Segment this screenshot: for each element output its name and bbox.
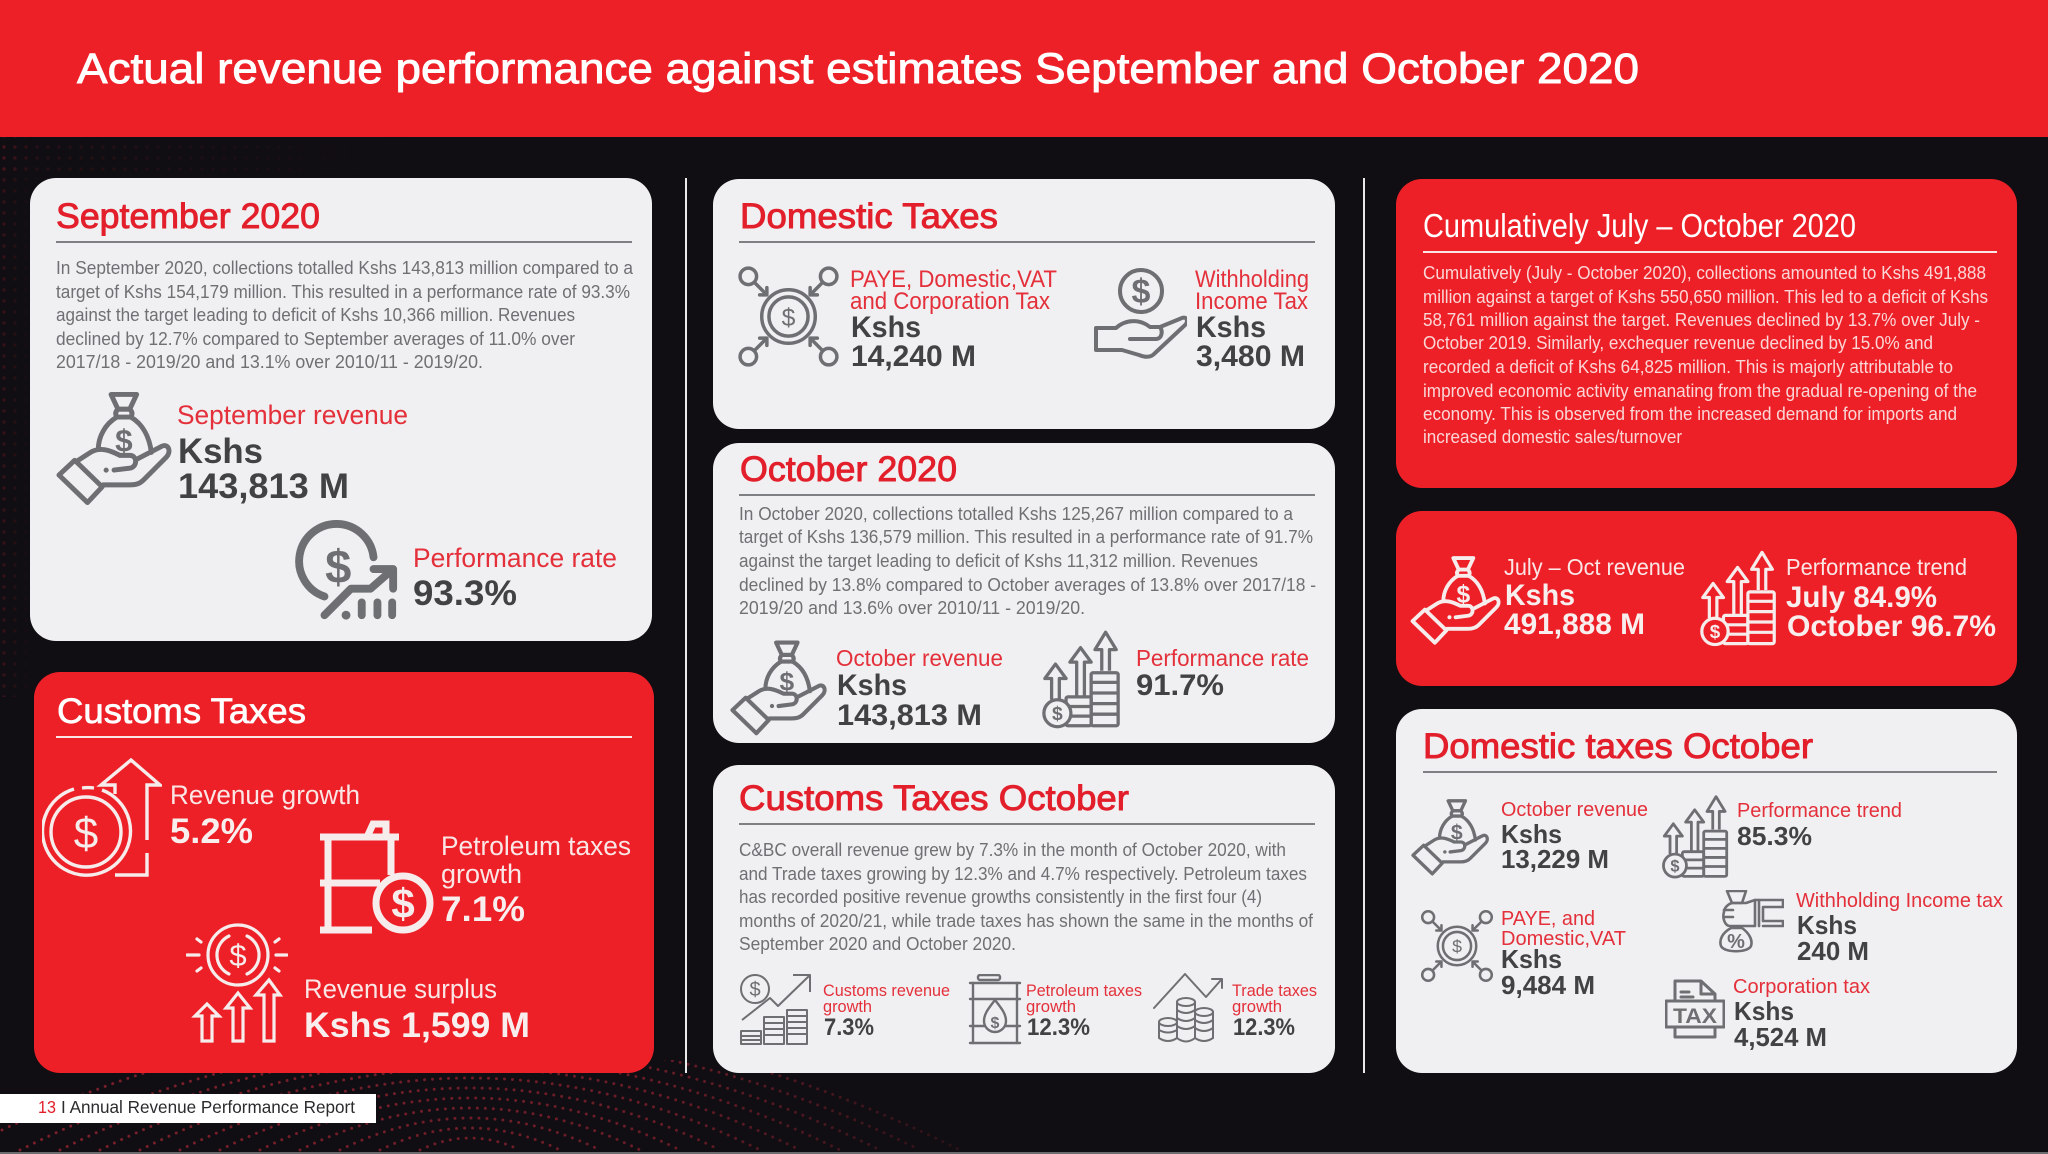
icon: money bag on hand xyxy=(732,643,825,733)
label: September revenue: September revenue xyxy=(177,400,408,430)
panel: Customs Taxes xyxy=(34,672,654,1073)
value: Kshs 4,524 M: 4,524 M xyxy=(1734,1022,1827,1052)
panel: September 2020 xyxy=(30,178,652,641)
icon: money bag on hand xyxy=(1413,558,1499,643)
text block: customs summary xyxy=(739,839,1314,954)
label: Performance rate: Performance rate xyxy=(413,543,617,573)
icon: coins and arrows xyxy=(1663,797,1727,877)
stat: Corporation tax xyxy=(1666,976,1870,1052)
label: Petroleum taxes growth: Petroleum taxes xyxy=(1026,981,1142,1000)
column divider left xyxy=(685,178,687,1073)
text block: October summary xyxy=(739,503,1316,618)
label: Petroleum taxes growth xyxy=(441,831,631,889)
stat: October revenue xyxy=(732,643,1003,733)
icon: hand with percent bag xyxy=(1720,891,1783,953)
label: Withholding Income Tax xyxy=(1195,266,1309,315)
value: July and October rates: October 96.7% xyxy=(1787,610,1996,643)
stat: Performance rate xyxy=(299,524,617,620)
text block: customs summary: has recorded positive revenue growths consistently in the first four (4) xyxy=(739,886,1262,907)
text block: October summary: against the target leading to deficit of Kshs 11,312 million. Revenues xyxy=(739,550,1258,571)
icon: money bag on hand xyxy=(59,394,169,503)
stat: Withholding Income tax xyxy=(1720,890,2003,966)
text block: cumulative summary xyxy=(1423,262,1988,447)
footer tag: 13 xyxy=(38,1097,56,1117)
value: Kshs 9,484 M: Kshs xyxy=(1501,944,1562,974)
stat: September revenue xyxy=(59,394,408,506)
value: 12.3%: 12.3% xyxy=(1233,1014,1295,1041)
header band xyxy=(0,0,2048,137)
value: 7.3%: 7.3% xyxy=(824,1014,874,1041)
value: Kshs 491,888 M xyxy=(1504,579,1645,641)
label: Petroleum taxes growth: growth xyxy=(441,859,522,889)
value: 93.3%: 93.3% xyxy=(413,574,517,613)
heading: Domestic taxes October: Domestic taxes October xyxy=(1423,727,1813,766)
value: Kshs 240 M xyxy=(1797,910,1869,966)
label: Petroleum taxes growth xyxy=(1026,981,1142,1016)
icon: coin, bars and rising arrow xyxy=(741,975,810,1044)
stat: Customs revenue growth xyxy=(741,975,950,1044)
label: Revenue growth: Revenue growth xyxy=(170,780,360,810)
label: July – Oct revenue: July – Oct revenue xyxy=(1504,554,1685,580)
heading: September 2020: September 2020 xyxy=(56,197,320,236)
icon: barrel with oil drop xyxy=(970,975,1020,1043)
text block: October summary: 2019/20 and 13.6% over 2010/11 - 2019/20. xyxy=(739,597,1085,618)
label: Withholding Income Tax: Income Tax xyxy=(1195,288,1308,315)
text block: cumulative summary: recorded a deficit of Kshs 64,825 million. This is majorly attributable to xyxy=(1423,356,1953,377)
label: PAYE, and Domestic, VAT: PAYE, and xyxy=(1501,908,1595,930)
text block: customs summary: C&BC overall revenue grew by 7.3% in the month of October 2020, with xyxy=(739,839,1286,860)
stat: Revenue growth xyxy=(43,760,360,875)
label: Performance trend: Performance trend xyxy=(1786,554,1967,580)
footer tag: I Annual Revenue Performance Report xyxy=(61,1097,355,1117)
icon: coin with up arrow xyxy=(43,760,160,875)
label: Petroleum taxes growth: Petroleum taxes xyxy=(441,831,631,861)
stat: Performance trend xyxy=(1702,552,1996,645)
label: Petroleum taxes growth: growth xyxy=(1026,997,1076,1016)
icon: money bag on hand xyxy=(1413,801,1487,874)
icon: coin network xyxy=(740,268,837,365)
stat: PAYE and Domestic VAT xyxy=(1422,908,1626,1000)
value: 85.3%: 85.3% xyxy=(1737,821,1812,851)
stat: Petroleum taxes growth xyxy=(320,824,631,930)
value: Kshs 143,813 M: Kshs xyxy=(837,669,907,702)
text block: October summary: declined by 13.8% compared to October averages of 13.8% over 2017/18 - xyxy=(739,574,1316,595)
value: Kshs 13,229 M: 13,229 M xyxy=(1501,844,1609,874)
label: Performance trend: Performance trend xyxy=(1737,800,1902,822)
value: 91.7%: 91.7% xyxy=(1136,669,1224,702)
heading: Customs Taxes: Customs Taxes xyxy=(57,692,306,731)
stat: Revenue surplus xyxy=(187,925,530,1045)
text block: cumulative summary: 58,761 million against the target. Revenues declined by 13.7% over July - xyxy=(1423,309,1980,330)
text block: cumulative summary: Cumulatively (July - October 2020), collections amounted to Kshs 491,888 xyxy=(1423,262,1986,283)
column divider right xyxy=(1363,178,1365,1073)
value: July and October rates xyxy=(1786,581,1996,643)
stat: Performance trend xyxy=(1663,797,1902,877)
label: Performance rate: Performance rate xyxy=(1136,645,1309,671)
label: Withholding Income Tax: Withholding xyxy=(1195,266,1309,293)
value: Kshs 491,888 M: 491,888 M xyxy=(1504,608,1645,641)
value: 12.3%: 12.3% xyxy=(1027,1014,1090,1041)
label: Revenue surplus: Revenue surplus xyxy=(304,974,497,1004)
value: July and October rates: July 84.9% xyxy=(1786,581,1937,614)
icon: coin network xyxy=(1422,911,1492,981)
value: Kshs 14,240 M: Kshs xyxy=(851,311,921,344)
icon: coin with rising arrow xyxy=(299,524,393,620)
label: Corporation tax: Corporation tax xyxy=(1733,976,1870,998)
label: PAYE and corporation xyxy=(850,266,1057,315)
value: Kshs 143,813 M: 143,813 M xyxy=(178,467,349,506)
panel: Domestic Taxes xyxy=(713,179,1335,429)
value: Kshs 14,240 M xyxy=(851,311,976,373)
label: PAYE and corporation: and Corporation Tax xyxy=(850,288,1050,315)
icon: coin with three arrows xyxy=(187,925,287,1041)
stat: Petroleum taxes growth xyxy=(970,975,1142,1043)
heading: Cumulatively July – October 2020: Cumulatively July – October 2020 xyxy=(1423,207,1856,244)
heading: Customs Taxes October: Customs Taxes October xyxy=(739,779,1129,818)
value: Kshs 3,480 M: Kshs xyxy=(1196,311,1266,344)
icon: zigzag arrow and coin stacks xyxy=(1154,974,1222,1042)
panel: Cumulatively July – October 2020 xyxy=(1396,179,2017,488)
value: Kshs 14,240 M: 14,240 M xyxy=(851,340,976,373)
value: Kshs 9,484 M xyxy=(1501,944,1595,1000)
text block: September summary: 2017/18 - 2019/20 and 13.1% over 2010/11 - 2019/20. xyxy=(56,351,483,372)
stat: October revenue xyxy=(1413,799,1648,874)
panel: Customs Taxes October xyxy=(713,765,1335,1073)
panel: July – Oct highlights xyxy=(1396,511,2017,686)
panel: Domestic taxes October xyxy=(1396,709,2017,1073)
label: Trade taxes growth: growth xyxy=(1232,997,1282,1016)
value: Kshs 143,813 M xyxy=(837,669,982,732)
value: Kshs 9,484 M: 9,484 M xyxy=(1501,970,1595,1000)
value: Kshs 4,524 M: Kshs xyxy=(1734,996,1794,1026)
text block: customs summary: months of 2020/21, while trade taxes has shown the same in the months of xyxy=(739,910,1314,931)
value: Kshs 1,599 M: Kshs 1,599 M xyxy=(304,1006,530,1045)
text block: cumulative summary: improved economic activity emanating from the gradual re-opening of the xyxy=(1423,380,1977,401)
value: 7.1%: 7.1% xyxy=(441,890,525,929)
text block: September summary: against the target leading to deficit of Kshs 10,366 million. Revenues xyxy=(56,304,575,325)
icon: hand holding coin xyxy=(1096,270,1187,357)
value: Kshs 13,229 M: Kshs xyxy=(1501,819,1562,849)
label: PAYE, and Domestic, VAT: Domestic,VAT xyxy=(1501,928,1626,950)
text block: customs summary: September 2020 and October 2020. xyxy=(739,933,1016,954)
stat: PAYE, Domestic, VAT and Corporation Tax xyxy=(740,266,1057,373)
text block: cumulative summary: economy. This is observed from the increased demand for imports and xyxy=(1423,403,1957,424)
text block: October summary: In October 2020, collections totalled Kshs 125,267 million compared to a xyxy=(739,503,1294,524)
text block: cumulative summary: increased domestic sales/turnover xyxy=(1423,426,1682,447)
text block: September summary: In September 2020, collections totalled Kshs 143,813 million compared to a xyxy=(56,257,634,278)
icon: tax document xyxy=(1666,981,1724,1037)
panel: October 2020 xyxy=(713,443,1335,743)
text block: customs summary: and Trade taxes growing by 12.3% and 4.7% respectively. Petroleum taxes xyxy=(739,863,1307,884)
value: Kshs 491,888 M: Kshs xyxy=(1505,579,1575,612)
text block: cumulative summary: October 2019. Similarly, exchequer revenue declined by 15.0% and xyxy=(1423,332,1933,353)
stat: Performance rate xyxy=(1044,632,1309,727)
value: Kshs 4,524 M xyxy=(1734,996,1827,1052)
icon: coins and arrows xyxy=(1044,632,1118,727)
icon: coins and arrows xyxy=(1702,552,1774,645)
label: October revenue: October revenue xyxy=(836,645,1003,671)
value: Kshs 3,480 M xyxy=(1196,311,1305,373)
label: PAYE, and Domestic, VAT xyxy=(1501,908,1626,950)
stat: Trade taxes growth xyxy=(1154,974,1317,1042)
value: Kshs 240 M: 240 M xyxy=(1797,936,1869,966)
text block: cumulative summary: million against a target of Kshs 550,650 million. This led to a deficit of Kshs xyxy=(1423,286,1988,307)
text block: September summary: declined by 12.7% compared to September averages of 11.0% over xyxy=(56,328,575,349)
label: Customs revenue growth: Customs revenue xyxy=(823,981,950,1000)
label: Customs revenue growth xyxy=(823,981,950,1016)
value: 5.2%: 5.2% xyxy=(170,812,253,851)
value: Kshs 240 M: Kshs xyxy=(1797,910,1857,940)
value: Kshs 143,813 M xyxy=(178,432,349,506)
label: Trade taxes growth: Trade taxes xyxy=(1232,981,1317,1000)
text block: September summary: target of Kshs 154,179 million. This resulted in a performance rate of 93.3% xyxy=(56,281,630,302)
text block: October summary: target of Kshs 136,579 million. This resulted in a performance rate of 91.7% xyxy=(739,526,1313,547)
label: Trade taxes growth xyxy=(1232,981,1317,1016)
footer tag xyxy=(0,1094,376,1123)
title: Actual revenue performance against estimates September and October 2020 xyxy=(77,45,1639,93)
value: Kshs 13,229 M xyxy=(1501,819,1609,874)
stat: Withholding Income Tax xyxy=(1096,266,1309,373)
value: Kshs 3,480 M: 3,480 M xyxy=(1196,340,1305,373)
value: Kshs 143,813 M: Kshs xyxy=(178,432,263,471)
label: PAYE and corporation: PAYE, Domestic,VAT xyxy=(850,266,1057,293)
stat: July – Oct revenue xyxy=(1413,554,1685,643)
heading: Domestic Taxes: Domestic Taxes xyxy=(740,197,998,236)
heading: October 2020: October 2020 xyxy=(740,450,957,489)
value: Kshs 143,813 M: 143,813 M xyxy=(837,699,982,732)
icon: oil barrel with coin xyxy=(320,824,430,930)
label: Withholding Income tax: Withholding Income tax xyxy=(1796,890,2003,912)
label: Customs revenue growth: growth xyxy=(823,997,872,1016)
label: October revenue: October revenue xyxy=(1501,799,1648,821)
text block: September summary xyxy=(56,257,634,372)
